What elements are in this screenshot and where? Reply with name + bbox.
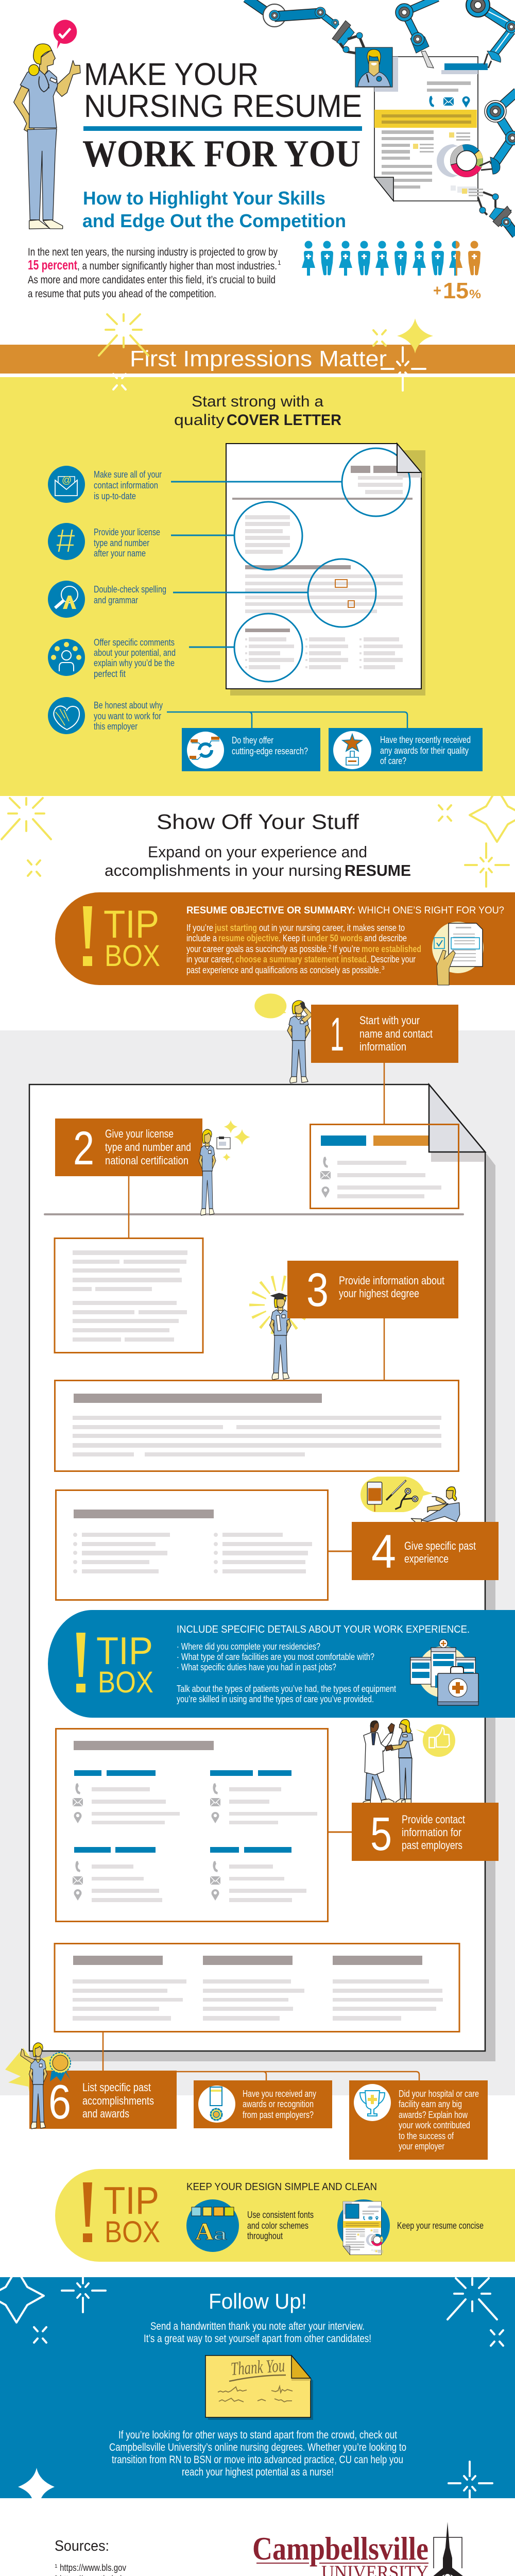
tip box: resume objective or summary: resume objective (218, 933, 279, 943)
step 2 callout: 2 (73, 1122, 94, 1175)
thank you note: Thank You (230, 2355, 285, 2379)
panel: follow up (0, 2277, 515, 2498)
tip box: resume objective or summary: WHICH ONE’S RIGHT FOR YOU? (358, 905, 504, 916)
callout: awards from past employers: Have you received any (243, 2089, 316, 2099)
intro paragraph: In the next ten years, the nursing industry is projected to grow by (28, 246, 278, 258)
hero resume document (374, 57, 488, 201)
callout: awards from past employers (194, 2080, 332, 2128)
sparkles around band (99, 314, 433, 391)
tip box: keep design simple: Keep your resume concise (397, 2221, 484, 2231)
subtitle: How to Highlight Your Skills (83, 188, 325, 209)
cover letter document (171, 444, 425, 696)
step 4 callout (328, 1522, 499, 1580)
tip box: keep design simple: throughout (247, 2231, 283, 2241)
logo: Campbellsville University Online Programs: Campbellsville (252, 2531, 428, 2567)
cover letter heading: Start strong with a (192, 393, 323, 410)
step 6 callout: 6 (48, 2075, 71, 2129)
step 3 graduate nurse with rays (257, 1283, 301, 1380)
cover letter heading: COVER LETTER (227, 412, 341, 429)
cover letter heading (174, 393, 341, 429)
sparkles: show off section (2, 788, 515, 887)
heading: show off your stuff (105, 810, 411, 879)
intro paragraph: 1 (278, 259, 281, 266)
hero robotic arms (246, 0, 515, 235)
icon: person with ideas (48, 639, 85, 676)
cover letter tips text: Be honest about why (94, 700, 163, 710)
follow up heading and intro: It’s a great way to set yourself apart from other candidates! (144, 2333, 371, 2345)
doctor and nurse shaking hands with thumbs up bubble (363, 1720, 455, 1804)
step 6 callout (29, 2071, 177, 2129)
icon: magnifier (48, 581, 85, 618)
step 4 callout: 4 (371, 1526, 396, 1578)
tip box: resume objective or summary (55, 892, 515, 985)
title: MAKE YOUR (84, 57, 259, 92)
sparkles: follow up panel (0, 2269, 503, 2505)
cover letter tips text: explain why you’d be the (94, 658, 175, 668)
cover letter tips text: type and number (94, 538, 149, 548)
step 2 callout: national certification (105, 1154, 188, 1167)
title: NURSING RESUME (84, 89, 362, 124)
resume section: accomplishments (55, 1943, 459, 2032)
cover letter tips text: about your potential, and (94, 648, 176, 658)
step 5 callout: information for (402, 1826, 461, 1839)
step 6 starburst (5, 2048, 54, 2100)
resume divider (44, 1213, 464, 1215)
step 6 callout: accomplishments (82, 2094, 154, 2107)
tip box: keep design simple: Use consistent fonts (247, 2210, 314, 2220)
step 2 callout (55, 1118, 202, 1238)
sources: Sources: (55, 2538, 109, 2554)
subtitle (82, 188, 346, 231)
cover letter tips text: Provide your license (94, 527, 160, 537)
callout: awards from past employers: from past employers? (243, 2110, 314, 2120)
callout: hospital awards: Did your hospital or care (399, 2089, 479, 2099)
tip box: resume objective or summary: 2 (329, 944, 332, 950)
gray background with large resume page (0, 1030, 515, 2095)
cover letter heading: quality (174, 412, 225, 429)
tip box: resume objective or summary: RESUME OBJECTIVE OR SUMMARY: (186, 905, 355, 916)
resume section: work experience (56, 1490, 328, 1600)
tip box: resume objective or summary: out in your nursing career, it makes sense to (259, 922, 405, 933)
heading: show off your stuff: Show Off Your Stuff (157, 810, 359, 834)
tip box: work experience details (48, 1610, 515, 1718)
intro paragraph: , a number significantly higher than most industries. (77, 260, 277, 272)
step 3 callout: your highest degree (339, 1287, 419, 1300)
title (82, 57, 362, 175)
step 3 callout: 3 (306, 1264, 329, 1316)
tip box: resume objective or summary: in your career, (186, 954, 234, 964)
tip box: resume objective or summary: . Describe your (367, 954, 416, 964)
cover letter tips text: Double-check spelling (94, 584, 166, 595)
callout: awards from past employers: awards or recognition (243, 2099, 314, 2109)
tip box: resume objective or summary: more established (362, 943, 421, 954)
tip box: work experience details: BOX (98, 1666, 153, 1699)
callout: quality awards (329, 728, 483, 771)
tip box: work experience details: Talk about the types of patients you’ve had, the types of equipment (177, 1683, 396, 1694)
step 1 callout: information (359, 1040, 406, 1053)
photo of nurse on resume (355, 47, 392, 87)
plus 15 percent label: 15 (443, 278, 469, 303)
tip box: resume objective or summary: . Keep it (279, 933, 305, 943)
cover letter tips text: Offer specific comments (94, 637, 175, 648)
icon: envelope: @ (62, 475, 72, 486)
icon: envelope (48, 466, 85, 503)
resume section: license details (55, 1239, 203, 1353)
callout: hospital awards (349, 2080, 488, 2160)
tip box: keep design simple: a (213, 2225, 227, 2244)
resume section: contact info (310, 1084, 485, 1209)
tip box: resume objective or summary: TIP (104, 903, 159, 946)
subtitle: and Edge Out the Competition (82, 210, 346, 231)
step 1 callout: name and contact (359, 1027, 433, 1040)
follow up closing paragraph: reach your highest potential as a nurse! (182, 2466, 334, 2478)
callout: hospital awards: awards? Explain how (399, 2110, 468, 2120)
callout: quality awards: Have they recently received (380, 735, 471, 745)
step 3 callout (287, 1261, 458, 1380)
tip box: keep design simple: KEEP YOUR DESIGN SIMPLE AND CLEAN (186, 2181, 377, 2193)
follow up closing paragraph: Campbellsville University’s online nursing degrees. Whether you’re looking to (109, 2442, 406, 2453)
step 1 speech bubble (254, 993, 286, 1019)
cover letter tips text: you want to work for (94, 711, 161, 721)
cover letter tips text: contact information (94, 480, 158, 490)
follow up closing paragraph: transition from RN to BSN or move into advanced practice, CU can help you (112, 2454, 403, 2466)
cover letter tips text: Make sure all of your (94, 469, 162, 480)
thank you note (205, 2355, 313, 2420)
follow up closing paragraph: If you’re looking for other ways to stand apart from the crowd, check out (118, 2429, 397, 2441)
section band: first impressions matter (0, 345, 515, 796)
step 1 callout: 1 (330, 1008, 344, 1061)
callout: hospital awards: your employer (399, 2141, 444, 2151)
intro paragraph (28, 246, 281, 300)
step 4 callout: Give specific past (404, 1539, 476, 1552)
callout: hospital awards: your work contributed (399, 2120, 470, 2130)
callout: cutting-edge research: cutting-edge research? (232, 746, 308, 756)
cover letter tips text: and grammar (94, 595, 138, 605)
step 3 callout: Provide information about (339, 1274, 444, 1287)
icon: hash (48, 523, 85, 560)
intro paragraph: 15 percent (28, 257, 77, 273)
tip box: resume objective or summary: include a (186, 933, 217, 943)
tip box: keep design simple: BOX (105, 2215, 160, 2249)
heading: show off your stuff: accomplishments in your nursing (105, 861, 342, 879)
tip box: resume objective or summary: If you’re (186, 922, 213, 933)
step 6 connector lines (103, 2032, 419, 2080)
plus 15 percent label: + (433, 282, 441, 299)
plus 15 percent label (433, 278, 481, 303)
step 2 nurse with certificate (199, 1120, 250, 1215)
step 2 callout: type and number and (105, 1141, 191, 1154)
callout: hospital awards: to the success of (399, 2131, 454, 2141)
section band: first impressions matter: First Impressions Matter (130, 346, 387, 371)
step 1 callout: Start with your (359, 1014, 420, 1027)
title: WORK FOR YOU (82, 133, 360, 175)
heading: show off your stuff: Expand on your experience and (148, 843, 367, 861)
logo: Campbellsville University Online Programs (252, 2522, 468, 2576)
tip box: resume objective or summary: past experience and qualifications as concisely as possible. (186, 964, 381, 975)
callout: hospital awards: facility earn any big (399, 2099, 462, 2109)
cover letter tips text (94, 469, 176, 732)
step 5 callout: past employers (402, 1839, 462, 1852)
cover letter tips text: perfect fit (94, 669, 126, 679)
step 4 nurse with medical tools bubble (360, 1477, 460, 1523)
tip box: keep design simple (55, 2169, 515, 2262)
step 1 nurse on phone (287, 1001, 313, 1083)
connector to employer questions (167, 712, 407, 728)
cover letter tips text: after your name (94, 548, 146, 558)
callout: quality awards: any awards for their quality (380, 745, 469, 756)
step 6 callout: and awards (82, 2107, 129, 2120)
tip box: resume objective or summary: and describe (364, 933, 407, 943)
step 6 callout: List specific past (82, 2081, 151, 2094)
callout: cutting-edge research: Do they offer (232, 735, 273, 745)
follow up closing paragraph (109, 2429, 406, 2478)
step 4 callout: experience (404, 1552, 449, 1565)
tip box: resume objective or summary: choose a summary statement instead (235, 954, 367, 964)
tip box: work experience details: INCLUDE SPECIFIC DETAILS ABOUT YOUR WORK EXPERIENCE. (177, 1624, 470, 1635)
step 5 callout: 5 (370, 1808, 392, 1860)
sources: 1 (55, 2564, 58, 2569)
step 6 nurse with medal (21, 2043, 71, 2129)
intro paragraph: As more and more candidates enter this field, it’s crucial to build (28, 274, 276, 286)
nurse with thumbs up and pink check bubble (14, 20, 80, 229)
tip box: keep design simple: and color schemes (247, 2221, 308, 2231)
step 5 callout (328, 1803, 499, 1861)
tip box: work experience details: TIP (96, 1629, 153, 1672)
tip box: resume objective or summary: If you’re (333, 943, 360, 954)
callout: cutting-edge research (182, 728, 320, 771)
pictogram row: 15 percent growth (302, 241, 480, 276)
tip box: keep design simple: TIP (104, 2179, 159, 2222)
tip box: work experience details: · Where did you complete your residencies? (177, 1641, 320, 1652)
tip box: resume objective or summary: BOX (105, 939, 160, 973)
tip box: resume objective or summary: your career goals as succinctly as possible. (186, 943, 329, 954)
step 1 callout (311, 1005, 458, 1124)
follow up heading and intro (144, 2289, 371, 2345)
sources: https://www.bls.gov (60, 2563, 126, 2573)
heading: show off your stuff: RESUME (345, 861, 411, 879)
follow up heading and intro: Send a handwritten thank you note after your interview. (150, 2320, 365, 2332)
callout: quality awards: of care? (380, 756, 406, 766)
resume section: past employers contact (56, 1729, 328, 1922)
step 5 callout: Provide contact (402, 1813, 465, 1826)
tip box: resume objective or summary: under 50 words (307, 933, 363, 943)
intro paragraph: a resume that puts you ahead of the competition. (28, 288, 216, 300)
plus 15 percent label: % (469, 287, 481, 301)
sources (55, 2538, 180, 2576)
cover letter tips text: is up-to-date (94, 491, 136, 501)
tip box: work experience details: · What type of care facilities are you most comfortable with? (177, 1651, 374, 1662)
follow up heading and intro: Follow Up! (209, 2289, 307, 2313)
tip box: resume objective or summary: 3 (382, 965, 385, 971)
cover letter tips text: this employer (94, 721, 138, 732)
tip box: work experience details: · What specific duties have you had in past jobs? (177, 1662, 336, 1672)
icon: heart and hand (48, 697, 85, 734)
tip box: keep design simple: A (195, 2218, 214, 2245)
tip box: work experience details: you’re skilled in using and the types of care you’ve provided. (177, 1693, 374, 1704)
step 2 callout: Give your license (105, 1127, 174, 1140)
tip box: resume objective or summary: just starting (214, 922, 257, 933)
resume section: education (55, 1381, 458, 1471)
